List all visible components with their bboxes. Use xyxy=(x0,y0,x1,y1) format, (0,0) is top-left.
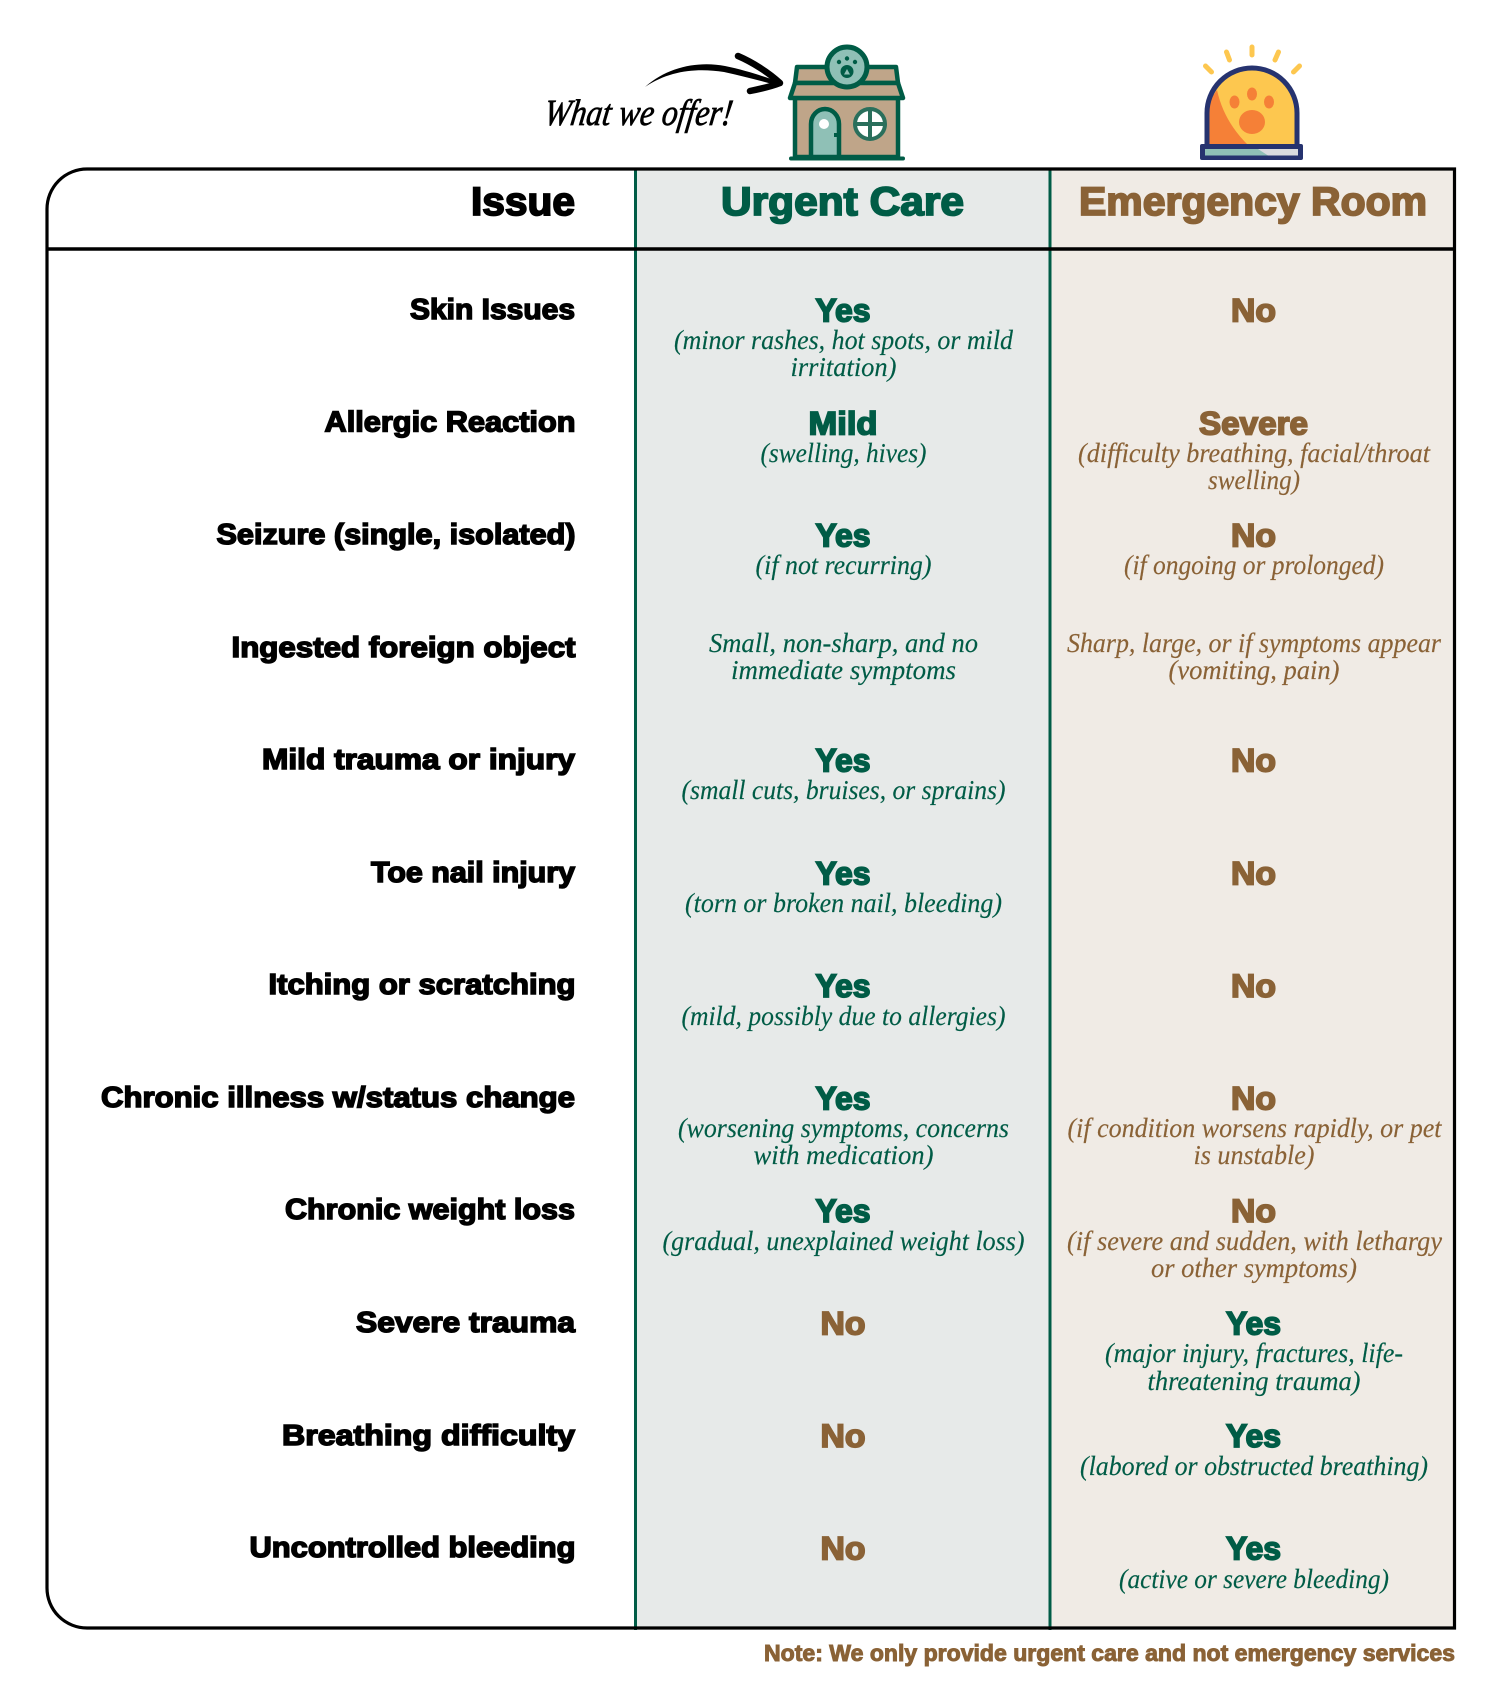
row: seizure: (if not recurring) xyxy=(756,550,932,580)
row: severe trauma xyxy=(356,1306,1403,1396)
row: itching or scratching: No xyxy=(1231,968,1276,1004)
row: uncontrolled bleeding xyxy=(250,1530,1389,1594)
row: chronic illness with status change: with medication) xyxy=(754,1140,934,1170)
row: seizure: (if ongoing or prolonged) xyxy=(1124,550,1384,580)
row: seizure xyxy=(216,518,1384,580)
header row xyxy=(471,180,1427,224)
icon: emergency siren xyxy=(1200,47,1303,160)
row: ingested foreign object: (vomiting, pain) xyxy=(1168,655,1340,685)
row: breathing difficulty: Breathing difficulty xyxy=(282,1420,575,1452)
row: chronic illness with status change: (if condition worsens rapidly, or pet xyxy=(1068,1113,1443,1143)
row: toe nail injury xyxy=(371,856,1276,918)
row: severe trauma: Yes xyxy=(1226,1306,1281,1342)
row: chronic weight loss: Yes xyxy=(816,1193,870,1229)
row: skin issues xyxy=(410,292,1276,382)
row: toe nail injury: Toe nail injury xyxy=(371,857,575,889)
row: uncontrolled bleeding: (active or severe bleeding) xyxy=(1119,1564,1389,1594)
row: itching or scratching: Itching or scratching xyxy=(268,969,576,1001)
row: uncontrolled bleeding: Yes xyxy=(1226,1530,1281,1566)
icon: veterinary clinic building xyxy=(790,47,903,158)
row: chronic illness with status change: Chronic illness w/status change xyxy=(101,1082,575,1114)
emergency room column background xyxy=(1050,169,1454,1628)
row: ingested foreign object: Small, non-sharp, and no xyxy=(709,628,978,658)
row: ingested foreign object: Ingested foreign object xyxy=(232,632,576,664)
row: skin issues: irritation) xyxy=(790,352,897,382)
row: severe trauma: threatening trauma) xyxy=(1148,1366,1361,1396)
row: toe nail injury: No xyxy=(1231,856,1276,892)
row: chronic illness with status change: Yes xyxy=(816,1080,870,1116)
footnote: Note: We only provide urgent care and not emergency services xyxy=(764,1640,1455,1666)
row: uncontrolled bleeding: No xyxy=(820,1530,866,1566)
row: breathing difficulty: (labored or obstructed breathing) xyxy=(1080,1451,1428,1481)
row: itching or scratching: Yes xyxy=(816,968,870,1004)
row: toe nail injury: (torn or broken nail, bleeding) xyxy=(685,888,1002,918)
row: allergic reaction xyxy=(324,406,1431,495)
row: itching or scratching xyxy=(268,968,1276,1031)
heading: issue: Issue xyxy=(471,180,575,224)
row: allergic reaction: Mild xyxy=(808,406,878,442)
row: breathing difficulty: No xyxy=(820,1418,866,1454)
callout: what we offer xyxy=(542,56,780,134)
row: allergic reaction: (difficulty breathing, facial/throat xyxy=(1078,438,1431,468)
row: skin issues: No xyxy=(1231,292,1276,328)
row: uncontrolled bleeding: Uncontrolled bleeding xyxy=(250,1532,576,1564)
row: skin issues: (minor rashes, hot spots, or mild xyxy=(674,325,1013,355)
row: mild trauma or injury xyxy=(262,742,1276,805)
row: breathing difficulty xyxy=(282,1418,1428,1481)
row: chronic weight loss xyxy=(285,1193,1442,1283)
row: chronic weight loss: (if severe and sudden, with lethargy xyxy=(1067,1226,1442,1256)
row: allergic reaction: swelling) xyxy=(1208,465,1300,495)
row: breathing difficulty: Yes xyxy=(1226,1418,1281,1454)
row: itching or scratching: (mild, possibly due to allergies) xyxy=(682,1001,1006,1031)
heading: urgent care: Urgent Care xyxy=(721,180,964,224)
row: toe nail injury: Yes xyxy=(816,856,870,892)
urgent care column background xyxy=(635,169,1050,1628)
row: skin issues: Skin Issues xyxy=(410,294,575,326)
heading: emergency room: Emergency Room xyxy=(1079,180,1427,224)
row: mild trauma or injury: (small cuts, bruises, or sprains) xyxy=(682,775,1006,805)
row: allergic reaction: Allergic Reaction xyxy=(324,406,576,438)
row: ingested foreign object xyxy=(232,628,1441,685)
row: mild trauma or injury: Mild trauma or injury xyxy=(262,744,575,776)
row: severe trauma: No xyxy=(820,1306,866,1342)
row: skin issues: Yes xyxy=(816,292,870,328)
row: chronic illness with status change xyxy=(101,1080,1443,1170)
row: mild trauma or injury: Yes xyxy=(816,742,870,778)
row: seizure: Yes xyxy=(816,518,870,554)
row: chronic weight loss: (gradual, unexplained weight loss) xyxy=(662,1226,1024,1256)
row: chronic weight loss: or other symptoms) xyxy=(1151,1253,1357,1283)
row: allergic reaction: Severe xyxy=(1199,406,1308,442)
row: chronic weight loss: No xyxy=(1231,1193,1276,1229)
arrow to clinic icon xyxy=(645,56,780,91)
callout text: What we offer! xyxy=(542,93,735,134)
row: chronic weight loss: Chronic weight loss xyxy=(285,1194,575,1226)
row: mild trauma or injury: No xyxy=(1231,742,1276,778)
row: ingested foreign object: immediate symptoms xyxy=(731,655,956,685)
row: seizure: Seizure (single, isolated) xyxy=(216,519,576,551)
row: ingested foreign object: Sharp, large, or if symptoms appear xyxy=(1067,628,1441,658)
row: chronic illness with status change: is unstable) xyxy=(1194,1140,1315,1170)
row: severe trauma: Severe trauma xyxy=(356,1307,576,1339)
row: chronic illness with status change: No xyxy=(1231,1080,1276,1116)
row: severe trauma: (major injury, fractures, life- xyxy=(1105,1338,1403,1368)
row: seizure: No xyxy=(1231,518,1276,554)
row: allergic reaction: (swelling, hives) xyxy=(760,438,927,468)
row: chronic illness with status change: (worsening symptoms, concerns xyxy=(678,1113,1009,1143)
